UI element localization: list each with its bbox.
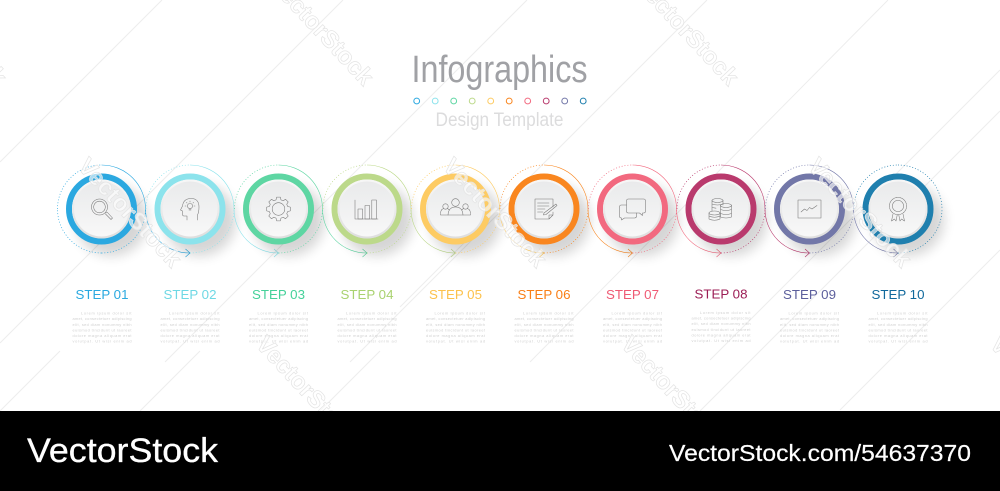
step labels: STEP 09 [783, 287, 836, 302]
row of coloured dots [414, 98, 586, 104]
step 06 body text: amet, consectetuer adipiscing [514, 316, 574, 321]
step 04 body text [338, 311, 397, 344]
step 09 circle [766, 165, 898, 257]
step 02 circle [146, 165, 278, 257]
title: Infographics [412, 49, 588, 91]
step labels: STEP 06 [518, 287, 570, 302]
step 03 body text: dolore magna aliquam erat [249, 333, 309, 338]
step 03 body text: Lorem ipsum dolor sit [258, 311, 309, 316]
icon: head with bulb [180, 198, 199, 220]
step 01 circle [58, 165, 190, 257]
step 03 circle [234, 165, 367, 257]
step labels: STEP 02 [164, 287, 216, 302]
step 01 body text [72, 311, 132, 344]
step 03 body text: euismod tincidunt ut laoreet [249, 327, 309, 332]
step 07 circle [588, 165, 721, 257]
icon: line chart in frame [798, 200, 821, 218]
step 05 body text: Lorem ipsum dolor sit [434, 311, 486, 316]
step 08 body text: dolore magna aliquam erat [692, 332, 751, 337]
step 02 body text [160, 311, 220, 344]
step 10 body text: dolore magna aliquam erat [868, 333, 928, 338]
watermarks: VectorStock [72, 153, 187, 273]
step 08 body text: Lorem ipsum dolor sit [700, 310, 751, 315]
step 08 body text: amet, consectetuer adipiscing [692, 316, 750, 321]
footer band [0, 411, 1000, 491]
step 04 circle [323, 165, 456, 257]
step 06 body text: euismod tincidunt ut laoreet [514, 327, 574, 332]
step 09 body text: euismod tincidunt ut laoreet [780, 327, 840, 332]
step 02 body text: amet, consectetuer adipiscing [160, 316, 220, 321]
step 03 body text: amet, consectetuer adipiscing [249, 316, 308, 321]
step 09 body text: amet, consectetuer adipiscing [780, 316, 839, 321]
step 03 body text: volutpat. Ut wisi enim ad [249, 339, 308, 344]
step 01 body text: elit, sed diam nonummy nibh [72, 322, 132, 327]
step 10 body text: amet, consectetuer adipiscing [868, 316, 928, 321]
step 04 body text: volutpat. Ut wisi enim ad [338, 339, 396, 344]
step 06 circle [500, 165, 632, 257]
step 03 body text [249, 311, 309, 344]
icon: chat bubbles [620, 199, 646, 220]
step labels: STEP 01 [76, 287, 128, 302]
step 05 body text: volutpat. Ut wisi enim ad [426, 339, 485, 344]
step 07 body text: euismod tincidunt ut laoreet [603, 327, 663, 332]
icon: gear [267, 197, 290, 221]
step 08 circle [677, 165, 810, 257]
step 06 body text: dolore magna aliquam erat [514, 333, 574, 338]
icon: bar chart [355, 200, 378, 219]
step 10 body text [868, 311, 928, 344]
step 01 body text: dolore magna aliquam erat [72, 333, 132, 338]
step 04 body text: amet, consectetuer adipiscing [338, 316, 396, 321]
step labels: STEP 10 [872, 287, 924, 302]
step 09 body text: volutpat. Ut wisi enim ad [780, 339, 839, 344]
step 04 body text: Lorem ipsum dolor sit [346, 311, 397, 316]
icon: coin stacks [709, 198, 732, 220]
step 05 circle [412, 165, 544, 257]
step 10 body text: Lorem ipsum dolor sit [877, 311, 928, 316]
icon: document and pen [535, 199, 557, 219]
icon: three people [440, 199, 471, 215]
step 05 body text: euismod tincidunt ut laoreet [426, 327, 486, 332]
step 06 body text: volutpat. Ut wisi enim ad [514, 339, 574, 344]
step 01 body text: Lorem ipsum dolor sit [81, 311, 132, 316]
icon: award medal [889, 197, 907, 221]
step 04 body text: euismod tincidunt ut laoreet [338, 327, 397, 332]
step 09 body text: dolore magna aliquam erat [780, 333, 840, 338]
step 09 body text: Lorem ipsum dolor sit [788, 311, 840, 316]
step 10 body text: elit, sed diam nonummy nibh [868, 322, 928, 327]
step 01 body text: amet, consectetuer adipiscing [72, 316, 132, 321]
step 07 body text: Lorem ipsum dolor sit [612, 311, 663, 316]
step 04 body text: elit, sed diam nonummy nibh [338, 322, 397, 327]
step 06 body text: Lorem ipsum dolor sit [523, 311, 574, 316]
step 08 body text: euismod tincidunt ut laoreet [692, 327, 751, 332]
step 10 circle [854, 165, 944, 256]
step 07 body text [603, 311, 663, 344]
step 09 body text: elit, sed diam nonummy nibh [780, 322, 839, 327]
footer image url: VectorStock.com/54637370 [669, 440, 971, 466]
step labels: STEP 07 [606, 287, 659, 302]
step 01 body text: euismod tincidunt ut laoreet [72, 327, 132, 332]
footer brand: VectorStock [27, 432, 219, 470]
watermarks: VectorStock [250, 331, 365, 451]
step 01 body text: volutpat. Ut wisi enim ad [72, 339, 132, 344]
subtitle: Design Template [436, 109, 564, 131]
step labels: STEP 03 [252, 287, 305, 302]
step 10 body text: euismod tincidunt ut laoreet [868, 327, 928, 332]
step labels: STEP 05 [429, 287, 482, 302]
step 02 body text: Lorem ipsum dolor sit [169, 311, 220, 316]
step labels: STEP 04 [341, 287, 393, 302]
step 07 body text: dolore magna aliquam erat [603, 333, 663, 338]
step 09 body text [780, 311, 840, 344]
step 05 body text: dolore magna aliquam erat [426, 333, 486, 338]
step 05 body text [426, 311, 486, 344]
step labels [76, 286, 924, 302]
step 05 body text: elit, sed diam nonummy nibh [426, 322, 485, 327]
watermarks: VectorStock [615, 331, 730, 451]
step 08 body text: elit, sed diam nonummy nibh [692, 321, 751, 326]
watermarks: VectorStock [437, 153, 552, 273]
step 08 body text: volutpat. Ut wisi enim ad [692, 338, 750, 343]
step 07 body text: elit, sed diam nonummy nibh [603, 322, 662, 327]
watermarks: VectorStock [802, 153, 917, 273]
step 06 body text [514, 311, 574, 344]
step 07 body text: volutpat. Ut wisi enim ad [603, 339, 662, 344]
step labels: STEP 08 [695, 286, 747, 302]
step 02 body text: volutpat. Ut wisi enim ad [160, 339, 220, 344]
step 04 body text: dolore magna aliquam erat [338, 333, 397, 338]
step 03 body text: elit, sed diam nonummy nibh [249, 322, 308, 327]
step 10 body text: volutpat. Ut wisi enim ad [868, 339, 928, 344]
step 07 body text: amet, consectetuer adipiscing [603, 316, 662, 321]
step 05 body text: amet, consectetuer adipiscing [426, 316, 485, 321]
step 08 body text [692, 310, 751, 343]
step 06 body text: elit, sed diam nonummy nibh [514, 322, 574, 327]
step 02 body text: elit, sed diam nonummy nibh [160, 322, 220, 327]
icon: magnifier [92, 199, 112, 220]
step 02 body text: euismod tincidunt ut laoreet [160, 327, 220, 332]
step 02 body text: dolore magna aliquam erat [160, 333, 220, 338]
